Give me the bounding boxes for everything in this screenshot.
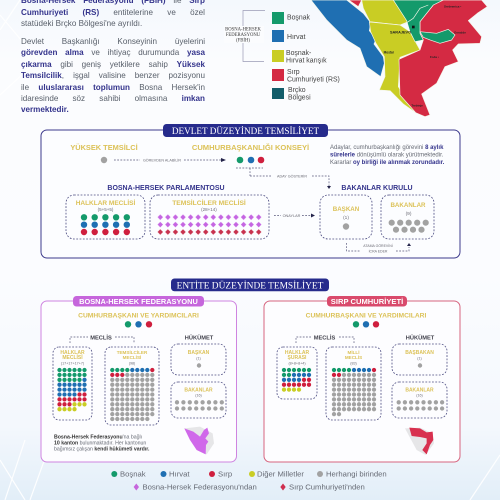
- intro text: vermektedir.: [21, 105, 69, 114]
- panel: Republika Srpska: [264, 296, 460, 462]
- explanation: sürelerle dönüşümlü olarak yürütmektedir.: [330, 152, 444, 158]
- high representative: YÜKSEK TEMSİLCİ: [70, 143, 138, 152]
- bracket label: BOSNA-HERSEK: [225, 28, 261, 32]
- legend: Serb: [272, 69, 340, 84]
- legend: [111, 470, 387, 492]
- cantons note: [54, 435, 150, 453]
- ministers: (16): [416, 394, 423, 398]
- house of representatives: TEMSİLCİLER MECLİSİ: [172, 198, 246, 207]
- arrow: can dismiss: [114, 158, 226, 162]
- intro text: Cumhuriyeti (RS) entitelerine ve özel: [21, 8, 205, 17]
- map of Bosnia: [311, 0, 487, 117]
- ministers: BAKANLAR: [405, 388, 434, 394]
- mini map: RS: [405, 428, 434, 455]
- intro text: idaresinde söz sahibi olmasına imkan: [21, 94, 205, 103]
- legend item: from RS: Sırp Cumhuriyeti'nden: [289, 483, 365, 492]
- bracket label: (FBİH): [236, 38, 250, 44]
- legend item: Serb: Sırp: [218, 470, 232, 479]
- intro text: ile uluslararası toplumun Bosna Hersek'in: [21, 83, 205, 92]
- legend: Bosniak: Boşnak: [287, 14, 311, 22]
- council of ministers heading: BAKANLAR KURULU: [341, 185, 413, 192]
- bracket label: [225, 28, 261, 44]
- house of representatives: MECLİSİ: [123, 354, 141, 360]
- explanation: [330, 145, 445, 166]
- federation title: BOSNA-HERSEK FEDERASYONU: [79, 297, 198, 306]
- mini map: federation: [184, 427, 214, 454]
- arrow: can dismiss: GÖREVDEN ALABİLİR: [143, 158, 181, 162]
- panel: federation: [41, 296, 236, 462]
- government heading: HÜKÜMET: [185, 335, 214, 342]
- national assembly: MECLİS: [345, 354, 362, 360]
- president and vice presidents: CUMHURBAŞKANI VE YARDIMCILARI: [78, 312, 199, 320]
- chair: BAŞKAN: [333, 206, 360, 213]
- arrow: approves: ONAYLAR: [283, 214, 301, 218]
- legend: Serb: Cumhuriyeti (RS): [287, 76, 340, 84]
- ministers: BAKANLAR: [390, 202, 426, 209]
- state level title: [163, 124, 328, 137]
- national assembly: [326, 347, 381, 420]
- map of Bosnia: Foča •: [430, 55, 439, 59]
- house of representatives: (98): [129, 362, 135, 366]
- cantons note: Bosna-Hersek Federasyonu'na bağlı: [54, 435, 142, 441]
- house of peoples: (17+17+17+7): [61, 362, 84, 366]
- map: inner boundary: [403, 5, 428, 25]
- presidency council: CUMHURBAŞKANLIĞI KONSEYİ: [192, 143, 309, 152]
- cantons note: 10 kanton bulunmaktadır. Her kantonun: [54, 441, 146, 447]
- legend: mixed: Hırvat karışık: [286, 58, 327, 64]
- legend: mixed: Boşnak-: [286, 50, 311, 57]
- map of Bosnia: Goražde: [454, 31, 466, 35]
- council of peoples: (8+8+8+4): [288, 362, 306, 366]
- house of representatives: TEMSİLCİLER: [117, 349, 148, 355]
- intro text: görevden alma ve ihtiyaç durumunda yasa: [21, 48, 205, 57]
- cantons note: bağımsız çalışan kendi hükümeti vardır.: [54, 447, 150, 453]
- ministers: (9): [406, 211, 412, 217]
- prime minister: (1): [417, 356, 422, 360]
- house of representatives: [150, 195, 269, 239]
- map: mixed region north: [362, 0, 408, 25]
- legend: Brcko: Bölgesi: [288, 94, 311, 102]
- house of peoples: HALKLAR: [60, 350, 85, 356]
- explanation: Adaylar, cumhurbaşkanlığı görevini 8 aylık: [330, 145, 444, 151]
- house of peoples: (5+5+5): [98, 207, 114, 212]
- council of peoples: HALKLAR: [285, 350, 309, 356]
- ministers: (16): [195, 394, 202, 398]
- chair: (1): [196, 356, 201, 360]
- council of peoples: [277, 347, 317, 399]
- assembly heading: MECLİS: [314, 335, 335, 342]
- president and vice presidents: [306, 312, 427, 327]
- ministers: [392, 382, 447, 418]
- house of representatives: [105, 347, 159, 425]
- ministers: [171, 382, 226, 418]
- map of Bosnia: Srebrenica •: [444, 4, 461, 8]
- president and vice presidents: [78, 312, 199, 327]
- assembly heading: MECLİS: [90, 335, 112, 342]
- legend item: Bosniak: Boşnak: [120, 470, 146, 479]
- legend: Serb: Sırp: [287, 69, 300, 76]
- intro text: Devlet Başkanlığı Konseyinin üyelerini: [21, 37, 205, 46]
- legend item: from federation: Bosna-Hersek Federasyonu'ndan: [142, 483, 257, 492]
- map: city labels: SARAJEVO: [390, 30, 411, 34]
- legend item: any: Herhangi birinden: [326, 470, 387, 479]
- map of Bosnia: Trebinje: [411, 103, 423, 107]
- state level title: DEVLET DÜZEYİNDE TEMSİLİYET: [172, 126, 319, 136]
- assembly heading: [296, 335, 354, 343]
- arrow: appointment: İCRA EDER: [369, 248, 388, 254]
- prime minister: [392, 344, 447, 375]
- presidency council: [192, 143, 309, 163]
- legend: Brcko: [272, 87, 311, 102]
- national assembly: (83): [350, 362, 357, 366]
- map of Bosnia: Mostar: [384, 51, 395, 55]
- legend item: other: Diğer Milletler: [257, 470, 304, 479]
- arrow: nominates: [236, 168, 331, 189]
- map: Serb region north: [349, 0, 362, 7]
- house of peoples: [66, 195, 145, 239]
- intro text: [21, 0, 206, 114]
- map: Serb region east: [399, 0, 487, 117]
- map: mixed region south: [369, 22, 420, 113]
- bracket label: FEDERASYONU: [226, 33, 261, 38]
- prime minister: BAŞBAKAN: [405, 350, 434, 356]
- high representative: [70, 143, 138, 163]
- intro text: statüdeki Brçko Bölgesi'ne ayrıldı.: [21, 19, 142, 28]
- legend: Brcko: Brçko: [288, 87, 306, 94]
- arrow: appointment: ATAMA GÖREVİNİ: [363, 243, 393, 248]
- legend: Croat: Hırvat: [287, 34, 305, 41]
- national assembly: MİLLİ: [348, 349, 360, 355]
- legend: mixed: [272, 50, 327, 64]
- map bracket: [224, 10, 265, 62]
- legend item: Croat: [160, 470, 190, 479]
- map: Croat region: [311, 0, 384, 77]
- president and vice presidents: CUMHURBAŞKANI VE YARDIMCILARI: [306, 312, 427, 320]
- council of peoples: ŞURASI: [288, 355, 307, 361]
- chair: [171, 344, 226, 375]
- map legend: [272, 12, 340, 102]
- chair: [320, 195, 372, 239]
- house of representatives: (28+14): [201, 207, 217, 212]
- house of peoples: [53, 347, 92, 420]
- arrow: appointment: [346, 243, 411, 254]
- ministers: BAKANLAR: [184, 388, 213, 394]
- map: Gorazde corridor: [420, 29, 455, 43]
- chair: (1): [343, 215, 349, 221]
- parliament heading: BOSNA-HERSEK PARLAMENTOSU: [107, 185, 225, 192]
- intro text: Temsilcilik, işgal valisine benzer pozisyonu: [21, 71, 205, 80]
- house of peoples: MECLİSİ: [62, 354, 83, 361]
- explanation: Kararlar oy birliği ile alınmak zorundadır.: [330, 160, 445, 166]
- ministers: [381, 195, 434, 239]
- chair: BAŞKAN: [188, 350, 210, 356]
- arrow: approves: [274, 214, 315, 218]
- entity level title: ENTİTE DÜZEYİNDE TEMSİLİYET: [177, 280, 324, 292]
- map: Sarajevo marker: [412, 26, 415, 28]
- arrow: nominates: ADAY GÖSTERİR: [277, 174, 307, 178]
- RS title: SIRP CUMHURİYETİ: [331, 297, 403, 306]
- legend item: Serb: [209, 470, 232, 479]
- intro text: çıkarma gibi geniş yetkilere sahip Yüksek: [21, 60, 205, 69]
- government heading: HÜKÜMET: [406, 335, 435, 342]
- map: Bosniak region: [393, 0, 443, 42]
- legend item: Croat: Hırvat: [169, 470, 190, 479]
- panel: state level: [41, 124, 460, 258]
- house of peoples: HALKLAR MECLİSİ: [76, 199, 135, 207]
- assembly heading: [70, 335, 134, 343]
